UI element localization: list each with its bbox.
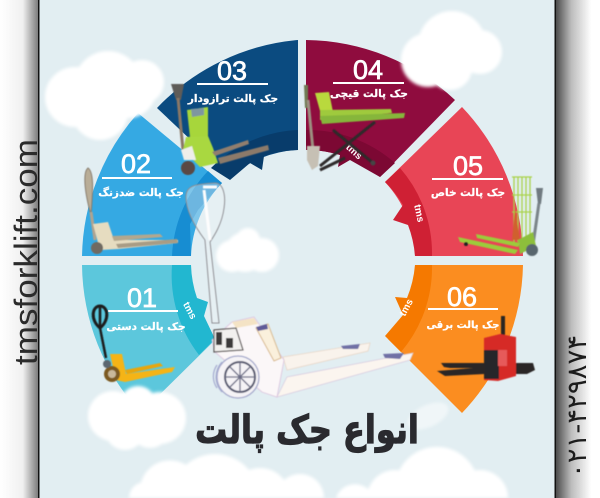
segment 06 [385,265,523,413]
segment 02 [82,113,222,256]
forks [283,343,370,370]
title: انواع جک پالت [195,408,419,453]
large white pallet jack [186,183,413,398]
segment 04: جک پالت قیچی [330,88,408,100]
segment 01 [82,265,215,413]
clouds behind ring [216,228,453,435]
segment 05: tms [411,204,426,224]
segment 04 [306,40,455,177]
right margin strip [556,0,600,498]
segment 02: 02 [121,149,151,179]
website text: tmsforklift.com [8,139,44,365]
segment 03: 03 [217,56,247,86]
segment 04: tms [343,142,364,162]
segment 05: جک پالت خاص [431,187,505,199]
segment 04: 04 [353,55,383,85]
segment 06: 06 [447,282,477,312]
jack 02: stainless [85,168,178,254]
segment 01: 01 [127,283,157,313]
segment 06: tms [398,297,416,318]
clouds in front of ring [45,11,508,498]
jack 04: green scissor lift [304,85,405,170]
handle [186,183,225,323]
jack 03: green with scale [171,84,269,175]
segment 05 [385,107,523,256]
segment 05: 05 [453,151,483,181]
left margin strip [0,0,38,498]
segment 02: جک پالت ضدزنگ [98,186,184,199]
jack 06: red electric [437,316,535,381]
wheel [217,356,259,398]
segment 03: جک پالت ترازودار [187,93,278,105]
segment 01: tms [180,300,198,322]
body [212,317,284,397]
phone number: ۰۲۱-۴۲۹۸۷۴ [562,335,593,478]
jack 05: green with cage [458,177,543,256]
mechanism [214,328,243,352]
segment 06: جک پالت برقی [427,320,499,331]
segment 01: جک پالت دستی [106,321,186,333]
jack 01: yellow manual [93,306,175,382]
segment 03 [157,40,298,180]
